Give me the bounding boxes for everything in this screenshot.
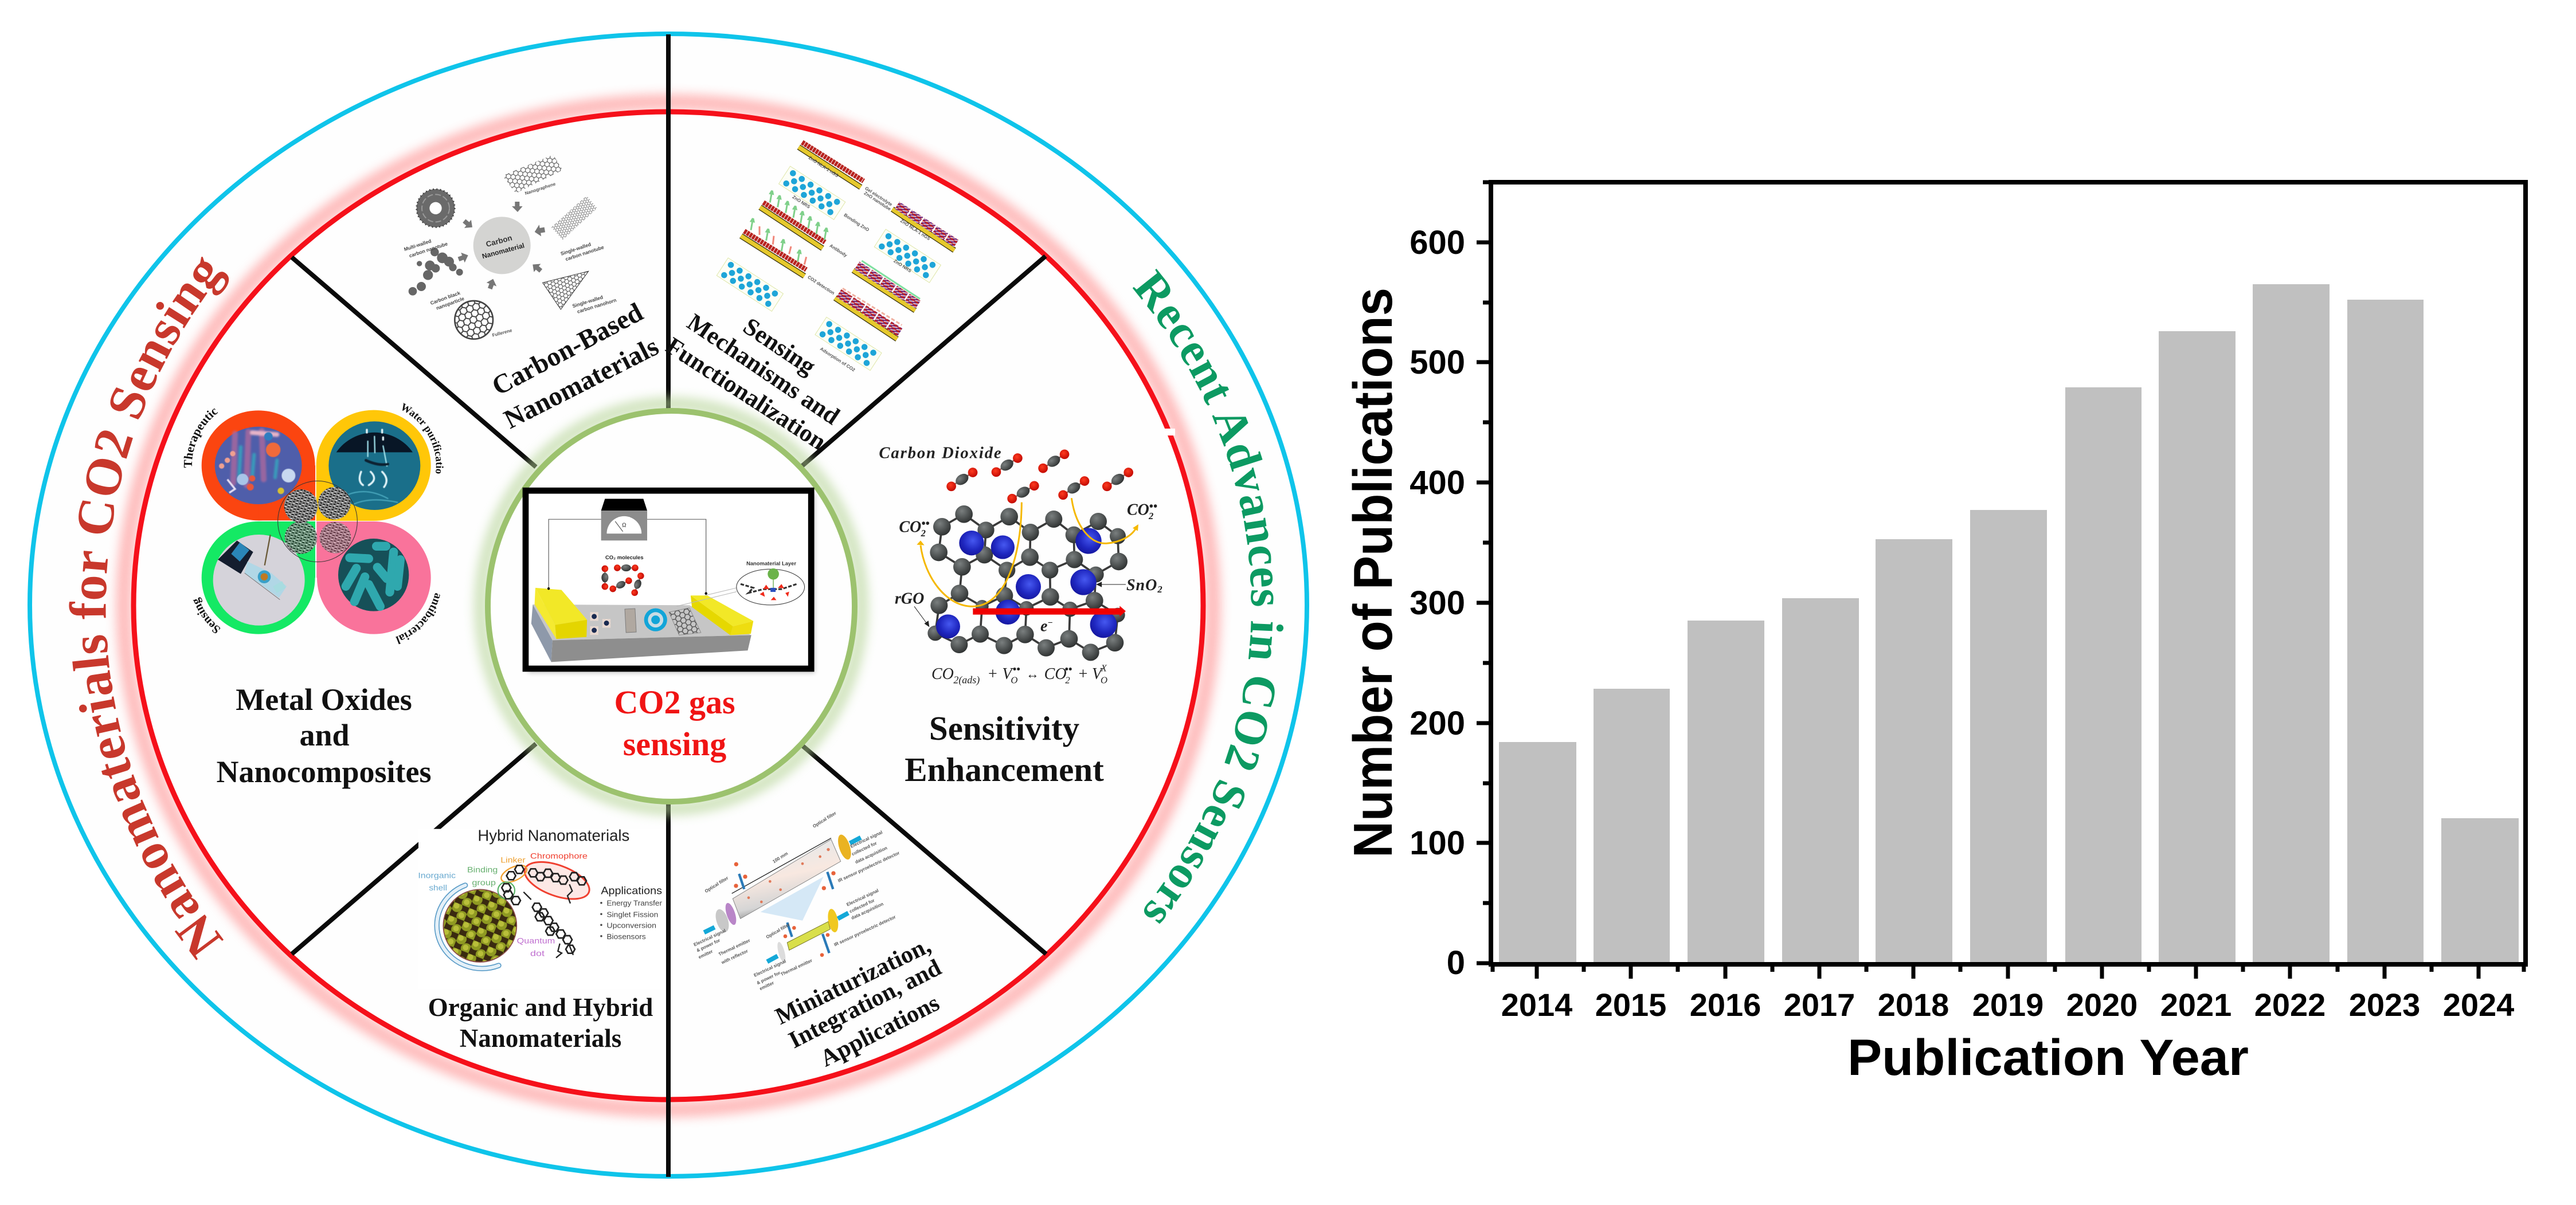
red inner ring glow — [124, 102, 1213, 1109]
caps and filters — [713, 833, 854, 963]
heading: sensing mechanisms and functionalization: Mechanisms and — [682, 309, 844, 430]
chemistry labels: 2 — [1157, 584, 1163, 595]
applications list: Upconversion — [606, 921, 656, 930]
molecular chains — [502, 865, 586, 958]
y tick labels — [1410, 224, 1465, 982]
coloured part labels: Chromophore — [530, 851, 588, 860]
x tick labels: 2015 — [1595, 987, 1666, 1023]
adsorption equation: O — [1101, 675, 1107, 686]
adsorption equation: V — [1092, 665, 1103, 683]
adsorption equation: + — [1079, 665, 1087, 683]
center caption: CO2 gas — [614, 684, 735, 721]
adsorption equation: ↔ — [1026, 667, 1039, 681]
heading: sensitivity enhancement — [905, 709, 1104, 788]
adsorption equation: + — [988, 665, 997, 683]
blue signal tabs and arrows — [704, 838, 861, 961]
yellow electrode strips — [741, 147, 954, 339]
coloured part labels: dot — [530, 948, 545, 957]
tiny labels: data acquisition — [854, 845, 888, 865]
heading: sensing mechanisms and functionalization: Sensing — [738, 313, 821, 380]
panel: wheel diagram — [28, 32, 1309, 1179]
heading: sensitivity enhancement: Sensitivity — [929, 709, 1079, 747]
heading: metal oxides — [217, 682, 431, 789]
right electrode — [691, 592, 753, 635]
heading: miniaturization, integration, applications: Miniaturization, — [772, 932, 935, 1030]
graphene sheet — [503, 155, 563, 196]
applications list: • — [600, 898, 603, 907]
single-walled nanotube — [551, 196, 605, 263]
heading: carbon-based nanomaterials: Carbon-Based — [487, 297, 648, 402]
nanohorn cone: carbon nanohorn — [577, 297, 617, 315]
tiny labels: Optical filter — [704, 876, 729, 894]
small yellow tube — [787, 921, 830, 950]
resistance meter: Ω — [622, 523, 627, 529]
single-walled nanotube: carbon nanotube — [565, 244, 605, 262]
x tick labels: 2020 — [2066, 987, 2137, 1023]
wires — [549, 519, 706, 594]
carbon black: nanoparticle — [435, 296, 465, 311]
nanomaterial samples on substrate — [590, 608, 701, 635]
x tick labels: 2018 — [1878, 987, 1949, 1023]
y axis title: Number of Publications — [1342, 288, 1404, 858]
chemistry labels — [895, 500, 1163, 635]
blue SnO2 atoms — [936, 528, 1117, 638]
applications list: • — [600, 932, 603, 940]
applications list: Singlet Fission — [606, 910, 658, 919]
tiny labels: collected for — [848, 898, 875, 914]
tiny labels: Electrical signal — [845, 888, 879, 907]
coloured part labels: Inorganic — [418, 871, 456, 880]
CO2 molecules — [945, 448, 1135, 505]
chemistry labels: rGO — [895, 590, 924, 607]
chemistry labels: •• — [1149, 500, 1157, 513]
red dots — [734, 862, 836, 957]
x axis title: Publication Year — [1847, 1029, 2249, 1086]
red electron arrow — [973, 606, 1126, 617]
white image backing — [418, 829, 666, 990]
plot frame — [1491, 182, 2526, 964]
center caption: sensing — [623, 725, 726, 763]
outer wheel disc with cyan ring — [30, 34, 1307, 1176]
red coatings and polymer layers — [744, 142, 956, 332]
y tick labels: 400 — [1410, 464, 1465, 501]
heading: metal oxides: Nanocomposites — [217, 755, 431, 789]
tiny labels: Antibody — [829, 243, 848, 258]
applications list: Energy Transfer — [606, 899, 663, 908]
coloured part labels: Binding — [467, 865, 498, 874]
adsorption equation: O — [1011, 675, 1017, 686]
heading: organic and hybrid nanomaterials: Nanomaterials — [460, 1024, 621, 1053]
chart: number of publications by year — [1342, 182, 2526, 1086]
y tick labels: 0 — [1447, 944, 1465, 982]
spokes dividing the six sectors — [292, 34, 1046, 1177]
chemistry labels: e — [1040, 618, 1047, 635]
red inner ring — [134, 112, 1203, 1100]
petal: antibacterial — [316, 521, 431, 634]
tiny labels: collected for — [851, 841, 878, 857]
chemistry labels: •• — [921, 517, 930, 530]
left electrode — [535, 587, 587, 639]
x tick labels — [1501, 987, 2514, 1023]
chemistry labels: − — [1047, 618, 1053, 628]
adsorption equation: CO — [1044, 665, 1067, 683]
chemistry labels: SnO — [1126, 576, 1157, 594]
tiny labels: IR sensor pyroelectric detector — [837, 850, 901, 884]
x tick labels: 2022 — [2254, 987, 2326, 1023]
applications list: • — [600, 909, 603, 918]
tiny labels: 100 mm — [772, 851, 789, 864]
panel: miniaturization illustration — [693, 810, 901, 991]
grey arrows — [457, 202, 546, 291]
carbon black: Carbon black — [429, 290, 461, 306]
petal labels: antibacterial — [396, 593, 440, 644]
petal: sensing — [202, 521, 315, 634]
chemistry labels: 2 — [1148, 511, 1153, 521]
nanomaterial layer inset: Nanomaterial Layer — [746, 561, 796, 567]
heading: carbon-based nanomaterials: Nanomaterials — [499, 332, 663, 435]
bars — [1499, 284, 2519, 963]
x tick labels: 2014 — [1501, 987, 1572, 1023]
tiny labels: & power for — [696, 938, 721, 953]
center circle — [488, 411, 855, 802]
grey carbon atoms — [927, 505, 1128, 661]
x tick labels: 2016 — [1690, 987, 1761, 1023]
yellow reaction arrows — [917, 498, 1138, 606]
tiny labels: Bonding ZnO — [843, 213, 870, 233]
y tick labels: 100 — [1410, 825, 1465, 862]
applications list: Applications — [601, 885, 662, 897]
fullerene: Fullerene — [492, 328, 513, 338]
y tick labels: 500 — [1410, 344, 1465, 381]
coloured part labels: Quantum — [517, 936, 555, 945]
tiny labels: Optical filter — [765, 922, 791, 940]
adsorption equation: V — [1002, 665, 1013, 683]
tiny labels: Electrical signal — [849, 830, 883, 849]
quantum dot and shell — [437, 885, 516, 968]
tiny labels: Thermal emitter — [718, 938, 751, 957]
gap in red ring — [1164, 429, 1175, 435]
adsorption equation: •• — [1013, 664, 1020, 676]
chemistry labels: CO — [1127, 501, 1149, 519]
coloured part labels: shell — [429, 883, 447, 892]
multi-walled nanotube: carbon nanotube — [408, 241, 448, 258]
adsorption equation: 2 — [1065, 675, 1070, 686]
tiny labels: CO2 detection — [807, 274, 836, 296]
petal labels — [183, 403, 444, 644]
nanohorn cone — [543, 271, 617, 315]
tiny labels: Electrical signal — [693, 928, 727, 947]
tiny labels: emitter — [698, 949, 714, 960]
light-blue funnel — [761, 877, 824, 921]
panel: sensing mechanisms illustration — [717, 142, 956, 373]
heading: organic and hybrid nanomaterials — [428, 993, 653, 1053]
tiny labels: ZnO NRS — [792, 194, 811, 210]
label: CO2 molecules: CO₂ molecules — [605, 555, 644, 560]
coloured part labels: Linker — [500, 855, 526, 864]
nanomaterial layer inset — [676, 561, 805, 606]
adsorption equation: X — [1101, 663, 1107, 674]
petal labels: Water purification — [402, 403, 444, 473]
petal labels: Sensing — [193, 597, 220, 634]
coloured part labels: group — [472, 878, 496, 887]
tiny labels: Adsorption of CO2 — [819, 346, 856, 373]
center caption — [614, 684, 735, 763]
carbon black — [409, 248, 465, 312]
x tick labels: 2019 — [1972, 987, 2043, 1023]
carbon dioxide label: Carbon Dioxide — [879, 443, 1001, 462]
diagram title: Hybrid Nanomaterials — [477, 826, 629, 844]
small CO2 molecules — [601, 564, 645, 597]
frame — [528, 494, 815, 673]
central carbon circle: Nanomaterial — [481, 241, 525, 260]
curved title: left: Nanomaterials for CO2 Sensing — [69, 257, 229, 960]
axis ticks — [1477, 182, 2524, 979]
ligand ellipses — [498, 854, 594, 906]
central carbon circle: Carbon — [485, 233, 513, 249]
center circle glow — [481, 404, 862, 808]
pointer lines — [914, 582, 1126, 626]
heading: carbon-based nanomaterials — [487, 297, 663, 435]
tiny labels: data acquisition — [851, 901, 884, 921]
y tick labels: 600 — [1410, 224, 1465, 261]
central SEM spheres — [278, 481, 357, 562]
heading: metal oxides: Metal Oxides — [236, 682, 412, 717]
central carbon circle — [473, 217, 531, 274]
nanohorn cone: Single-walled — [571, 294, 604, 309]
adsorption equation: •• — [1064, 664, 1072, 676]
x tick labels: 2024 — [2443, 987, 2514, 1023]
chemistry labels: CO — [899, 518, 921, 536]
tiny labels: with reflector — [720, 948, 749, 965]
tiny labels — [792, 155, 931, 373]
sensor device illustration — [526, 490, 815, 673]
tiny labels: ZnO NLA-1 nGS — [808, 155, 840, 179]
applications list: • — [600, 921, 603, 929]
heading: sensitivity enhancement: Enhancement — [905, 751, 1104, 788]
curved title: right: Recent Advances in CO2 Sensors — [1133, 269, 1284, 924]
multi-walled nanotube: Multi-walled — [403, 238, 432, 252]
tiny labels: emitter — [759, 980, 775, 991]
large tube — [732, 838, 841, 919]
lattice bonds — [935, 514, 1119, 652]
heading: miniaturization, integration, applications — [772, 932, 945, 1072]
tiny labels: Electrical signal — [753, 959, 787, 978]
panel: metal oxides illustration — [183, 403, 444, 644]
applications list — [600, 885, 663, 941]
tiny labels: Thermal emitter — [780, 958, 813, 977]
heading: miniaturization, integration, applications: Integration, and — [785, 955, 945, 1054]
heading: organic and hybrid nanomaterials: Organic and Hybrid — [428, 993, 653, 1022]
y tick labels: 200 — [1410, 705, 1465, 742]
tiny labels: Gel electrolyte — [864, 186, 894, 207]
adsorption equation: CO — [931, 665, 954, 683]
tiny labels: ZnO NLA-1 nGS — [899, 218, 931, 242]
coloured part labels — [418, 851, 588, 957]
substrate — [531, 605, 751, 662]
tiny labels: ZnO nanotube — [863, 190, 892, 212]
petal labels: Therapeutic — [183, 408, 218, 468]
x tick labels: 2017 — [1784, 987, 1855, 1023]
panel: center CO2 gas sensing — [481, 404, 862, 808]
slabs with blue dots — [717, 166, 941, 371]
fullerene — [455, 301, 513, 339]
resistance meter — [601, 499, 647, 540]
tiny labels: & power for — [756, 970, 781, 986]
tiny labels — [693, 810, 901, 991]
petal: therapeutic — [202, 410, 315, 520]
x tick labels: 2023 — [2349, 987, 2420, 1023]
x tick labels: 2021 — [2160, 987, 2232, 1023]
graphene sheet: Nanographene — [524, 181, 557, 196]
panel: sensitivity enhancement illustration — [879, 443, 1163, 686]
tiny labels: IR sensor pyroelectric detector — [833, 914, 896, 947]
heading: miniaturization, integration, applications: Applications — [816, 990, 944, 1072]
heading: metal oxides: and — [299, 718, 350, 752]
stems on layers — [748, 190, 829, 265]
adsorption equation: 2(ads) — [953, 674, 980, 686]
y tick labels: 300 — [1410, 584, 1465, 622]
panel: hybrid nanomaterials illustration — [418, 826, 666, 990]
applications list: Biosensors — [606, 932, 646, 941]
petal: water purification — [316, 410, 431, 521]
chemistry labels: 2 — [921, 528, 926, 539]
tiny labels: Optical filter — [812, 810, 837, 829]
tiny labels: ZnO NRS — [892, 258, 913, 274]
panel: carbon nanomaterials illustration — [403, 155, 617, 339]
multi-walled nanotube — [403, 189, 455, 260]
single-walled nanotube: Single-walled — [560, 241, 592, 257]
heading: sensing mechanisms and functionalization: Functionalization — [661, 332, 831, 456]
